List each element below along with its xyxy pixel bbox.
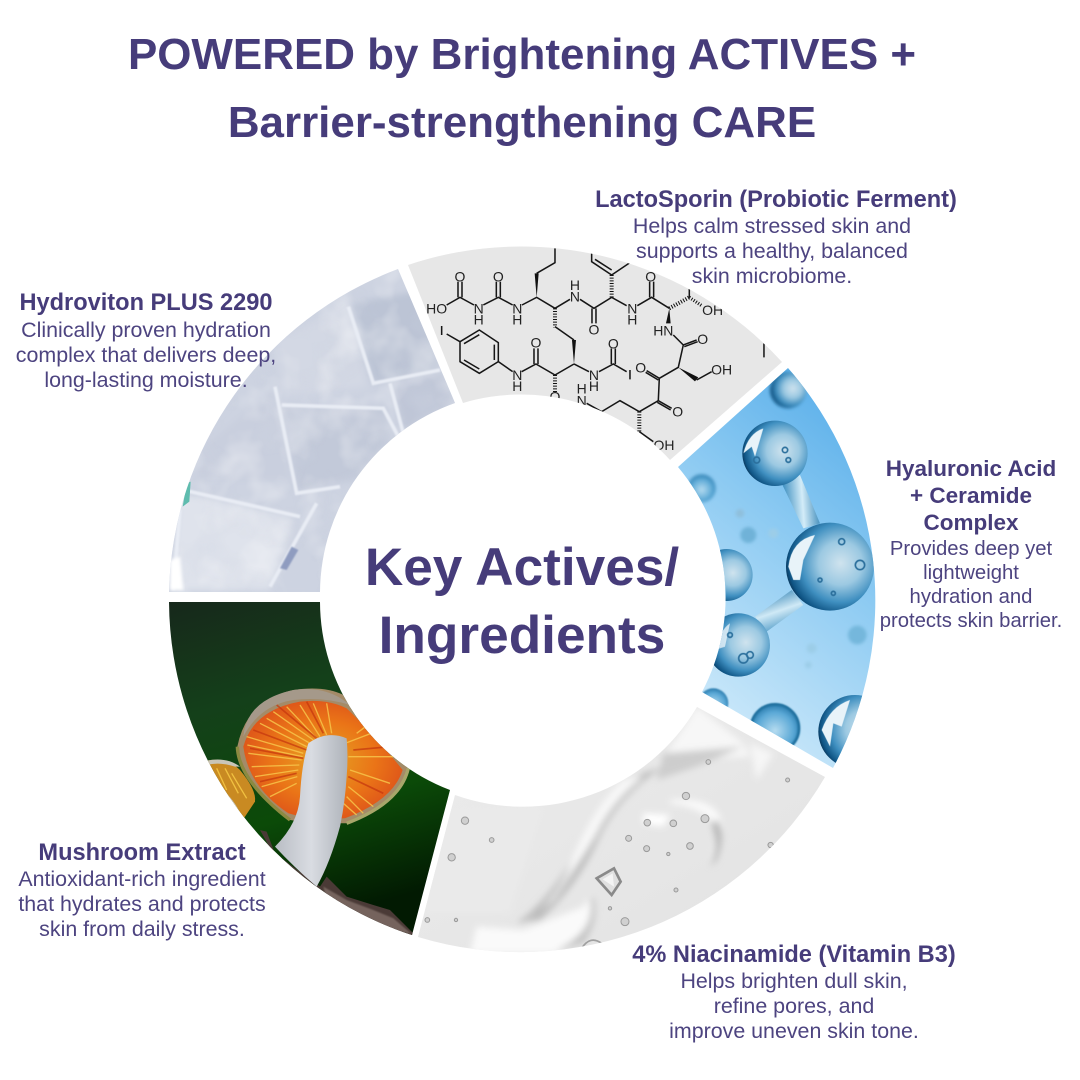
atom labels: O (697, 331, 708, 347)
callout: Hyaluronic Acid (880, 456, 1062, 632)
atom labels: H (570, 277, 580, 293)
bubbles (425, 760, 790, 926)
callout: Mushroom Extract: Mushroom Extract (38, 840, 246, 866)
atom labels: OH (711, 361, 732, 377)
soil (260, 830, 417, 937)
callout: Hyaluronic Acid: protects skin barrier. (880, 610, 1062, 632)
callout: Hyaluronic Acid: + Ceramide (910, 483, 1032, 508)
atom labels: O (531, 335, 542, 351)
callout: Hyaluronic Acid: Complex (923, 510, 1019, 535)
atom labels: O (589, 321, 600, 337)
callout: Niacinamide: 4% Niacinamide (Vitamin B3) (632, 942, 956, 968)
callout: Hyaluronic Acid: Hyaluronic Acid (886, 456, 1056, 481)
callout: Hydroviton: complex that delivers deep, (16, 343, 276, 367)
center label (365, 538, 679, 665)
panel: mushroom segment (169, 602, 450, 935)
atom labels: N (474, 300, 484, 316)
callout: Niacinamide: improve uneven skin tone. (669, 1019, 919, 1043)
callout: LactoSporin: skin microbiome. (692, 264, 852, 288)
callout: Mushroom Extract: Antioxidant-rich ingredient (18, 867, 266, 891)
callout: Hyaluronic Acid: lightweight (923, 562, 1019, 584)
atom labels (426, 268, 732, 453)
atom labels: H (512, 378, 522, 394)
atom labels: N (512, 300, 522, 316)
atom labels: OH (653, 437, 674, 453)
center label: Ingredients (379, 606, 665, 665)
callout: Niacinamide (632, 942, 956, 1043)
callout: Hyaluronic Acid: hydration and (910, 586, 1032, 608)
panel: molecule segment (408, 246, 782, 460)
sphere bonds (782, 475, 820, 528)
sphere highlights (715, 428, 850, 747)
atom labels: HN (653, 323, 673, 339)
atom labels: N (589, 367, 599, 383)
atom labels: O (608, 335, 619, 351)
callout: Mushroom Extract: skin from daily stress. (39, 917, 245, 941)
atom labels: N (570, 289, 580, 305)
mushroom cap (237, 688, 408, 823)
callout: LactoSporin: LactoSporin (Probiotic Ferment) (595, 187, 957, 213)
atom labels: N (512, 367, 522, 383)
atom labels: O (672, 404, 683, 420)
atom labels: N (577, 393, 587, 409)
atom labels: O (493, 268, 504, 284)
atom labels: H (589, 378, 599, 394)
callout: Mushroom Extract (18, 840, 266, 941)
panel: gel segment (410, 700, 830, 960)
callout: Mushroom Extract: that hydrates and protects (18, 892, 266, 916)
center label: Key Actives/ (365, 538, 679, 597)
small mushroom (207, 760, 255, 822)
callout: Hydroviton (16, 290, 276, 392)
callout: Hydroviton: long-lasting moisture. (44, 368, 248, 392)
atom labels: H (577, 380, 587, 396)
atom labels: OH (702, 302, 723, 318)
callout: Niacinamide: refine pores, and (714, 994, 874, 1018)
icon: chemical structure (426, 248, 764, 453)
callout: LactoSporin: supports a healthy, balanced (636, 239, 908, 263)
atom labels: H (474, 311, 484, 327)
atom labels: H (627, 311, 637, 327)
atom labels: O (455, 268, 466, 284)
callout: Niacinamide: Helps brighten dull skin, (680, 969, 908, 993)
atom labels: N (627, 300, 637, 316)
atom labels: O (635, 360, 646, 376)
atom labels: O (550, 389, 561, 405)
callout: LactoSporin (595, 187, 957, 288)
panel: hyaluronic molecule segment (678, 368, 876, 768)
panel: ice segment (169, 269, 455, 592)
callout: LactoSporin: Helps calm stressed skin and (633, 214, 911, 238)
callout: Hydroviton: Clinically proven hydration (21, 318, 271, 342)
atom labels: O (645, 268, 656, 284)
atom labels: HO (426, 300, 447, 316)
atom labels: H (512, 311, 522, 327)
blurred molecules (688, 372, 867, 668)
title: Barrier-strengthening CARE (228, 98, 816, 147)
spheres (742, 421, 808, 486)
title (128, 30, 916, 147)
callout: Hyaluronic Acid: Provides deep yet (890, 538, 1053, 560)
callout: Hydroviton: Hydroviton PLUS 2290 (19, 290, 273, 316)
title: POWERED by Brightening ACTIVES + (128, 30, 916, 79)
mushroom stem (275, 735, 347, 887)
